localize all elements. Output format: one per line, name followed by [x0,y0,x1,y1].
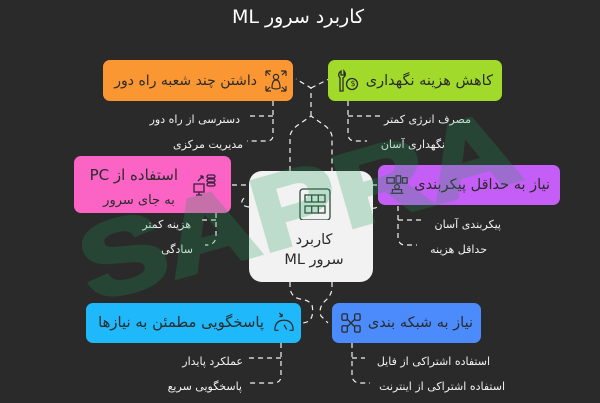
watermark: SAPRA [66,89,531,324]
title: کاربرد سرور ML [232,6,364,28]
panel: multiple remote branches [103,60,293,101]
text: internet sharing: استفاده اشتراکی از اینترنت [379,380,505,393]
panel: networking need [332,303,481,343]
panel: reduce maintenance cost [328,60,502,101]
text: central management: مدیریت مرکزی [173,138,243,151]
text: stable performance: عملکرد پایدار [182,355,243,368]
heading: center label [284,232,344,268]
icon: devices [386,175,408,194]
heading: reliable response: پاسخگویی مطمئن به نیازها [98,314,264,331]
text: fast response: پاسخگویی سریع [168,380,242,393]
text: lower energy use: مصرف انرژی کمتر [384,113,471,126]
heading: use PC: استفاده از PC [90,166,178,184]
text: easy maintenance: نگهداری آسان [381,138,445,151]
panel: PC instead of server [74,156,231,213]
text: file sharing: استفاده اشتراکی از فایل [377,355,490,368]
panel: reduce maintenance cost: $ [350,79,356,88]
heading: use PC: به جای سرور [103,193,175,208]
icon: server grid [299,188,331,220]
text: easy configuration: پیکربندی آسان [434,218,501,231]
heading: center label: سرور ML [284,252,344,268]
panel: reliable response [86,303,301,343]
heading: center label: کاربرد [296,232,332,248]
text: minimal cost: حداقل هزینه [430,243,487,256]
panel: minimal configuration [378,165,560,205]
heading: reduce cost: کاهش هزینه نگهداری [366,73,493,89]
icon: gauge [274,312,294,331]
heading: remote branches: داشتن چند شعبه راه دور [114,73,257,89]
icon: computer and database [193,174,216,196]
text: remote access: دسترسی از راه دور [150,113,240,126]
heading: networking: نیاز به شبکه بندی [368,315,473,331]
text: lower cost: هزینه کمتر [142,218,191,231]
text: simplicity: سادگی [161,243,193,256]
heading: configuration: نیاز به حداقل پیکربندی [414,177,550,193]
panel: center [249,171,373,282]
heading: use PC [90,166,178,208]
icon: wrench and coin [338,69,358,92]
icon: person with arrows [265,70,287,92]
icon: network nodes [341,313,361,333]
